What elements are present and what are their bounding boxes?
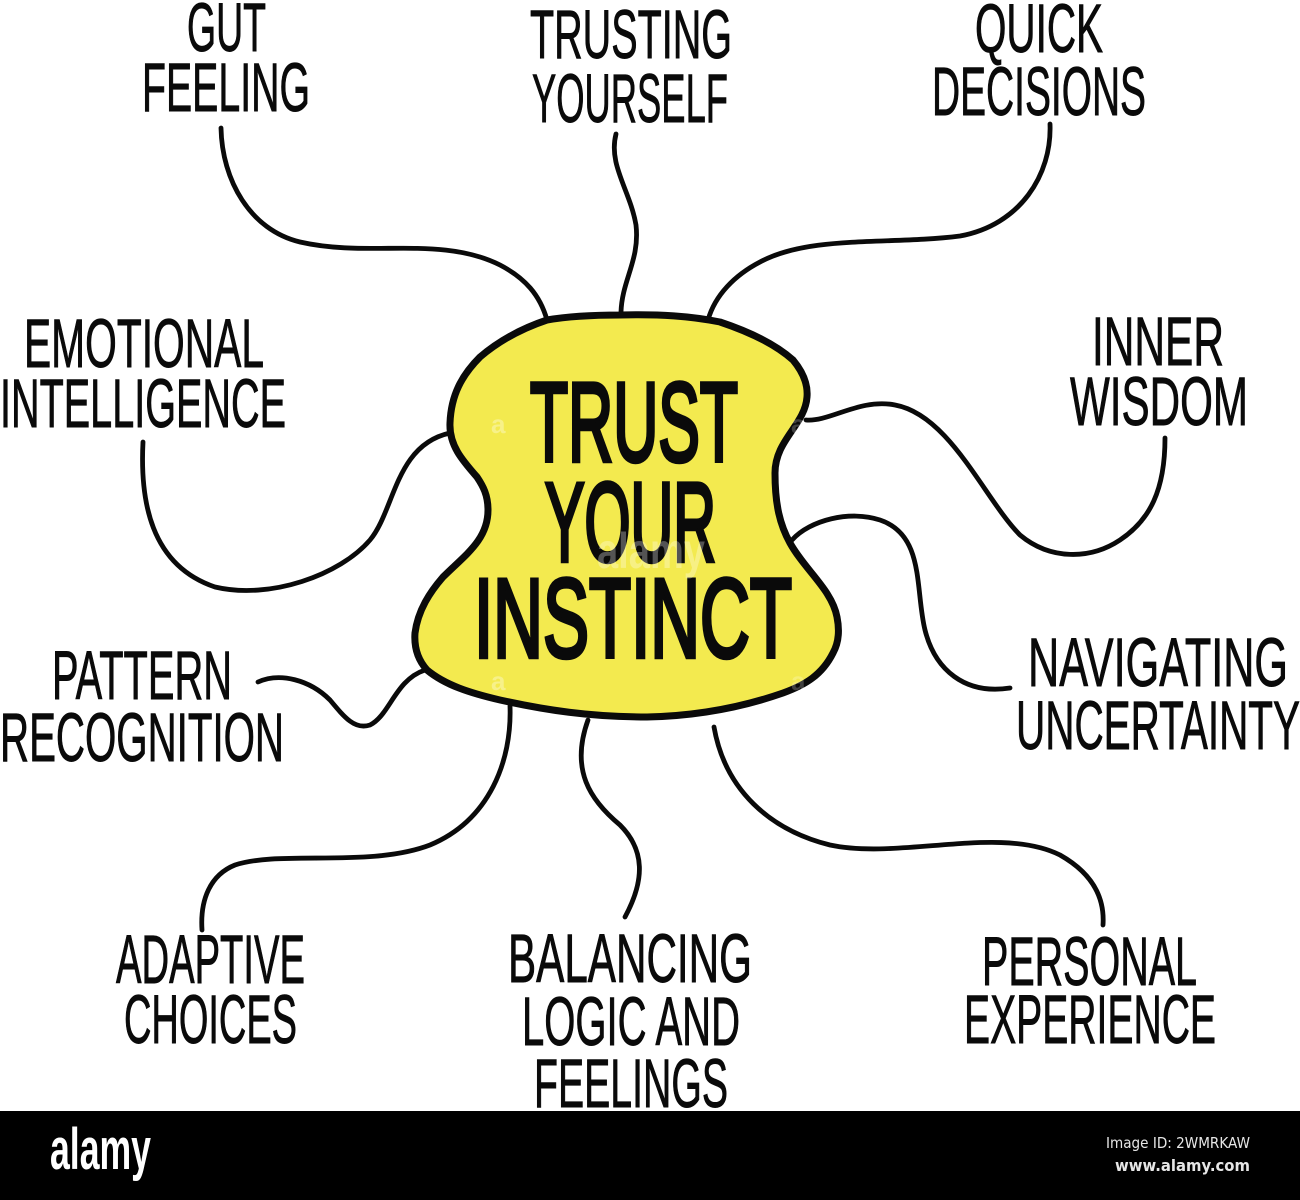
label: gut feeling: FEELING — [142, 49, 310, 126]
title: trust your instinct — [474, 360, 792, 681]
label: adaptive choices: CHOICES — [124, 981, 297, 1058]
label: balancing logic and feelings: LOGIC AND — [522, 983, 740, 1060]
central yellow blob — [415, 315, 838, 717]
label: adaptive choices: ADAPTIVE — [116, 921, 305, 998]
footer bar — [0, 1111, 1300, 1200]
label: trusting yourself: YOURSELF — [532, 60, 728, 137]
label: personal experience — [964, 923, 1216, 1058]
title: trust your instinct: TRUST — [530, 360, 738, 485]
connector: balancing logic and feelings — [581, 720, 639, 917]
label: pattern recognition: PATTERN — [52, 637, 232, 714]
title: trust your instinct: INSTINCT — [474, 556, 792, 681]
label: gut feeling — [142, 0, 310, 126]
footer bar: www.alamy.com — [1115, 1156, 1250, 1175]
connector: navigating uncertainty — [792, 516, 1010, 689]
connector: personal experience — [714, 727, 1103, 925]
footer bar: alamy — [50, 1117, 151, 1182]
connector: trusting yourself — [614, 134, 637, 312]
watermark: a — [791, 409, 806, 439]
connector: gut feeling — [221, 128, 547, 320]
watermark: a — [491, 409, 506, 439]
label: trusting yourself — [530, 0, 732, 137]
footer bar: Image ID: 2WMRKAW — [1106, 1134, 1250, 1152]
label: emotional intelligence: EMOTIONAL — [24, 305, 264, 382]
connector: emotional intelligence — [143, 433, 450, 590]
connector: pattern recognition — [258, 670, 425, 726]
watermark — [491, 409, 806, 696]
label: adaptive choices — [116, 921, 305, 1058]
label: inner wisdom — [1070, 303, 1248, 440]
watermark: a — [791, 666, 806, 696]
label: pattern recognition — [0, 637, 284, 776]
watermark: a — [491, 666, 506, 696]
label: emotional intelligence: INTELLIGENCE — [0, 365, 286, 442]
label: balancing logic and feelings — [508, 920, 752, 1122]
connector: inner wisdom — [806, 404, 1165, 554]
label: balancing logic and feelings: BALANCING — [508, 920, 752, 997]
label: emotional intelligence — [0, 305, 286, 442]
label: quick decisions — [932, 0, 1146, 130]
title: trust your instinct: YOUR — [545, 460, 716, 585]
connector: adaptive choices — [202, 706, 510, 930]
watermark: alamy — [597, 523, 705, 579]
connector: quick decisions — [708, 124, 1050, 320]
label: balancing logic and feelings: FEELINGS — [534, 1045, 728, 1122]
label: navigating uncertainty — [1016, 624, 1300, 764]
label: pattern recognition: RECOGNITION — [0, 699, 284, 776]
